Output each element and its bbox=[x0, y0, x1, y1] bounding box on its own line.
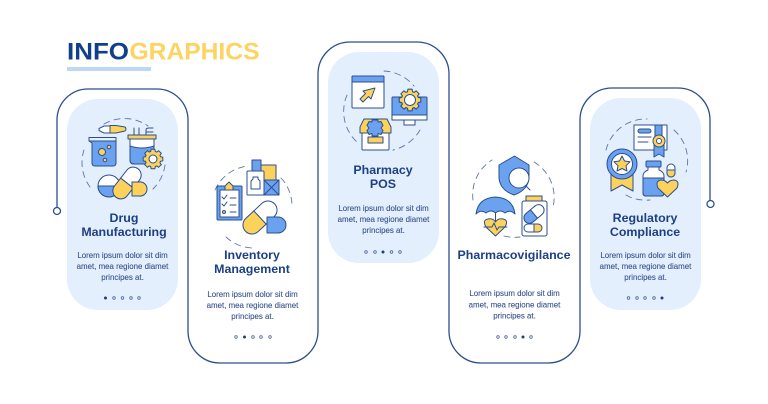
heading: Drug bbox=[110, 211, 138, 225]
body text: amet, mea regione diamet bbox=[77, 262, 169, 271]
title bbox=[67, 38, 260, 71]
pagination dots bbox=[627, 296, 664, 300]
title: INFO bbox=[67, 38, 129, 66]
heading: Compliance bbox=[610, 225, 680, 239]
panel: drug manufacturing bbox=[67, 99, 178, 310]
icon: point of sale bbox=[344, 71, 427, 150]
heading: Pharmacovigilance bbox=[458, 248, 571, 262]
pagination dots bbox=[235, 336, 271, 338]
panel: pharmacovigilance bbox=[458, 156, 571, 338]
body text: principes at. bbox=[624, 273, 667, 282]
panel: pharmacy pos bbox=[328, 52, 439, 263]
icon: compliance bbox=[606, 119, 688, 200]
heading: Management bbox=[214, 262, 290, 276]
icon: lab equipment and pills bbox=[82, 119, 165, 202]
pagination dots bbox=[104, 296, 140, 300]
icon: safety bbox=[473, 156, 554, 237]
body text: Lorem ipsum dolor sit dim bbox=[469, 289, 560, 298]
body text: amet, mea regione diamet bbox=[469, 300, 561, 310]
body text: Lorem ipsum dolor sit dim bbox=[77, 251, 168, 260]
title: GRAPHICS bbox=[130, 38, 260, 66]
body text: principes at. bbox=[493, 312, 536, 320]
pagination dots bbox=[497, 336, 532, 338]
heading: Inventory bbox=[224, 248, 280, 262]
body text: Lorem ipsum dolor sit dim bbox=[338, 204, 429, 213]
body text: Lorem ipsum dolor sit dim bbox=[600, 251, 691, 260]
body text: amet, mea regione diamet bbox=[207, 301, 299, 310]
body text: amet, mea regione diamet bbox=[338, 215, 430, 224]
pagination dots bbox=[365, 250, 401, 254]
body text: principes at. bbox=[362, 226, 405, 235]
body text: Lorem ipsum dolor sit dim bbox=[207, 290, 298, 299]
heading: Regulatory bbox=[613, 211, 677, 225]
heading: POS bbox=[370, 177, 396, 191]
panel: regulatory compliance bbox=[590, 98, 701, 310]
heading: Pharmacy bbox=[353, 163, 413, 177]
heading: Manufacturing bbox=[81, 225, 167, 239]
icon: inventory bbox=[215, 160, 292, 248]
body text: principes at. bbox=[101, 273, 144, 282]
connector outline bbox=[54, 42, 714, 363]
body text: amet, mea regione diamet bbox=[600, 262, 692, 271]
body text: principes at. bbox=[231, 312, 274, 321]
panel: inventory management bbox=[207, 160, 299, 338]
